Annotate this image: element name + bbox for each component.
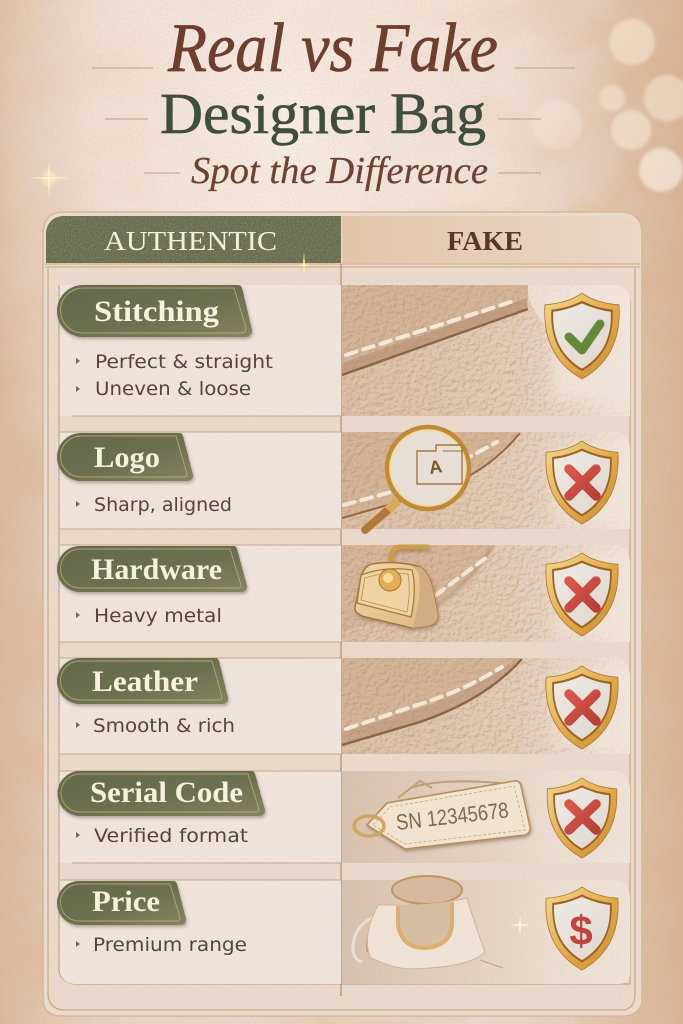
- header: fake: [342, 216, 638, 263]
- text: Premium range: Premium range: [93, 934, 247, 956]
- icon: bag clasp: [355, 547, 438, 628]
- title line: Real vs Fake: Real vs Fake: [167, 10, 498, 87]
- icon: magnifier: A: [428, 456, 443, 478]
- text: Uneven & loose: Uneven & loose: [95, 378, 251, 400]
- title line: Spot the Difference: Spot the Difference: [191, 150, 488, 192]
- title line: Designer Bag: Designer Bag: [160, 81, 486, 146]
- panel: hardware: [57, 545, 342, 642]
- icon: handbag: [353, 876, 503, 969]
- icon: shield cross logo: [546, 441, 618, 524]
- label: Logo: Logo: [94, 441, 160, 474]
- label: Leather: Leather: [92, 665, 198, 698]
- icon: shield dollar: [546, 887, 618, 970]
- label: Serial Code: Serial Code: [90, 776, 243, 809]
- photo: leather: [342, 658, 642, 754]
- icon: header sparkle: [296, 252, 312, 276]
- icon: shield cross serial: [547, 778, 617, 858]
- header: fake: FAKE: [447, 226, 523, 256]
- panel: serial code: [58, 771, 342, 863]
- icon: magnifier: [365, 427, 469, 530]
- label: Leather: [57, 658, 228, 704]
- icon: shield dollar: $: [569, 907, 593, 954]
- text: Smooth & rich: Smooth & rich: [93, 715, 235, 737]
- label: Stitching: Stitching: [94, 295, 219, 328]
- text: Verified format: Verified format: [94, 825, 248, 847]
- label: Hardware: Hardware: [91, 553, 222, 586]
- photo: hardware leather: [342, 545, 642, 642]
- label: Serial Code: [58, 771, 265, 816]
- panel: price: [57, 880, 341, 984]
- icon: shield check: [545, 293, 619, 379]
- label: Price: Price: [92, 885, 160, 918]
- panel: leather: [57, 658, 342, 754]
- icon: shield cross leather: [546, 666, 618, 749]
- title: [92, 10, 575, 192]
- label: Price: [57, 881, 186, 925]
- photo: serial backdrop: [342, 771, 630, 863]
- photo: price backdrop: [342, 880, 630, 984]
- icon: serial tag: [354, 781, 530, 849]
- icon: sparkle left: [28, 160, 70, 198]
- label: Hardware: [57, 546, 247, 592]
- icon: serial tag: SN 12345678: [395, 797, 510, 835]
- panel: stitching: [57, 285, 342, 416]
- text: Sharp, aligned: Sharp, aligned: [94, 494, 232, 516]
- label: Logo: [57, 433, 193, 481]
- icon: shield cross hardware: [546, 553, 618, 636]
- header: authentic: AUTHENTIC: [104, 226, 277, 256]
- photo: stitching leather: [342, 285, 642, 416]
- photo: logo leather: [342, 432, 642, 529]
- panel: logo: [57, 432, 342, 529]
- header: authentic: [46, 216, 341, 263]
- text: Perfect & straight: Perfect & straight: [95, 351, 273, 373]
- table frame: [43, 212, 642, 1016]
- label: Stitching: [57, 285, 252, 337]
- text: Heavy metal: Heavy metal: [94, 605, 222, 627]
